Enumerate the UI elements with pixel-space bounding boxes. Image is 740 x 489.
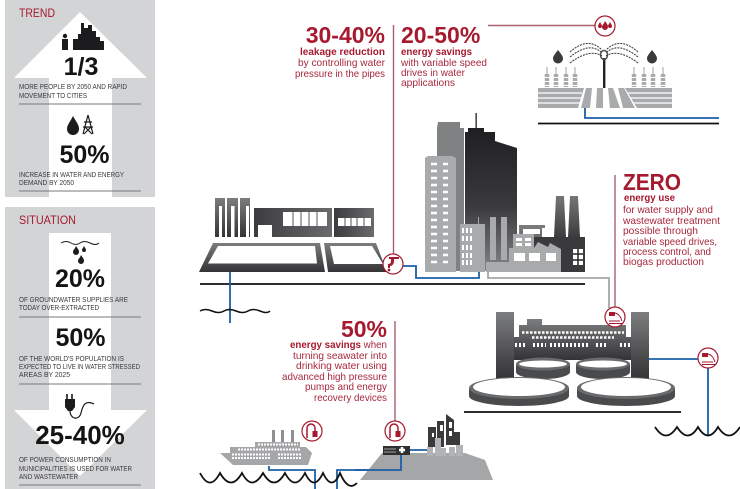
- wave: sea: [200, 473, 357, 486]
- text: zero energy use: [622, 169, 720, 268]
- caption: population: AREAS BY 2025: [19, 370, 70, 379]
- caption: groundwater: OF GROUNDWATER SUPPLIES ARE: [19, 295, 128, 304]
- caption: increase: DEMAND BY 2050: [19, 178, 74, 187]
- text: variable speed drives: with variable speed: [400, 57, 487, 69]
- text: zero energy use: variable speed drives,: [623, 236, 717, 248]
- caption: population: [19, 354, 140, 379]
- panel: situation: [5, 207, 155, 489]
- caption: power: MUNICIPALITIES IS USED FOR WATER: [19, 464, 132, 473]
- text: zero energy use: energy use: [624, 192, 675, 204]
- text: desalination savings: turning seawater into: [293, 350, 387, 362]
- caption: increase: [19, 170, 124, 187]
- icon: wastewater treatment marker: [605, 307, 625, 327]
- caption: power: [19, 455, 132, 481]
- stat: one third: 1/3: [64, 53, 98, 81]
- text: zero energy use: process control, and: [623, 246, 711, 258]
- icon: irrigation drops: [595, 16, 615, 36]
- panel: trend: [5, 0, 155, 197]
- caption: population: EXPECTED TO LIVE IN WATER STRESSED: [19, 362, 140, 371]
- illustration: water treatment works: [199, 198, 387, 272]
- caption: more people: [19, 82, 127, 100]
- icon: outflow marker: [698, 348, 718, 368]
- icon: tap: [383, 254, 403, 274]
- arrow: up: [14, 12, 147, 197]
- text: desalination savings: [282, 316, 388, 404]
- text: zero energy use: biogas production: [623, 256, 704, 268]
- text: variable speed drives: applications: [401, 77, 455, 89]
- illustration: irrigated field: [538, 43, 672, 108]
- caption: power: AND WASTEWATER: [19, 472, 78, 481]
- icon: person and city: [62, 23, 104, 50]
- text: leakage reduction: [295, 22, 385, 80]
- text: desalination savings: pumps and energy: [305, 381, 388, 393]
- illustration: wastewater plant: [469, 312, 675, 406]
- stat: fifty percent population: 50%: [55, 324, 106, 352]
- text: desalination savings: recovery devices: [314, 392, 387, 404]
- icon: plug: [65, 394, 94, 418]
- text: zero energy use: for water supply and: [623, 204, 713, 216]
- heading: situation: SITUATION: [19, 213, 76, 227]
- text: desalination savings: energy savings when: [290, 339, 387, 351]
- illustration: island and coastal city: [355, 414, 493, 480]
- text: desalination savings: drinking water using: [296, 360, 387, 372]
- text: leakage reduction: 30-40%: [306, 22, 385, 48]
- icon: desalination marker: [385, 421, 405, 441]
- stat: power share: 25-40%: [35, 420, 125, 450]
- stat: fifty percent: 50%: [59, 141, 110, 169]
- icon: drop and pylon: [67, 115, 93, 135]
- caption: more people: MORE PEOPLE BY 2050 AND RAPID: [19, 82, 127, 91]
- wave: intake: [200, 310, 270, 312]
- text: zero energy use: ZERO: [623, 169, 681, 195]
- caption: increase: INCREASE IN WATER AND ENERGY: [19, 170, 124, 179]
- icon: groundwater: [61, 242, 99, 264]
- text: variable speed drives: 20-50%: [401, 22, 480, 48]
- illustration: city skyline: [425, 113, 585, 272]
- text: desalination savings: 50%: [341, 316, 387, 342]
- heading: trend: TREND: [19, 6, 55, 20]
- wave: outflow: [655, 427, 740, 436]
- text: leakage reduction: leakage reduction: [300, 46, 385, 58]
- connector lines: [200, 25, 719, 489]
- text: zero energy use: possible through: [623, 225, 698, 237]
- text: leakage reduction: by controlling water: [298, 57, 385, 69]
- caption: groundwater: [19, 295, 128, 312]
- caption: power: OF POWER CONSUMPTION IN: [19, 455, 111, 464]
- text: zero energy use: wastewater treatment: [622, 215, 720, 227]
- text: variable speed drives: drives in water: [401, 67, 465, 79]
- text: variable speed drives: energy savings: [401, 46, 472, 58]
- text: variable speed drives: [400, 22, 487, 89]
- caption: population: OF THE WORLD'S POPULATION IS: [19, 354, 124, 363]
- stat: twenty percent: 20%: [55, 265, 105, 293]
- text: desalination savings: advanced high pressure: [282, 371, 387, 383]
- text: leakage reduction: pressure in the pipes: [295, 68, 385, 80]
- icon: ship desalination marker: [302, 421, 322, 441]
- caption: groundwater: TODAY OVER-EXTRACTED: [19, 303, 99, 312]
- illustration: cruise ship: [220, 430, 312, 465]
- arrow: down: [14, 233, 147, 476]
- caption: more people: MOVEMENT TO CITIES: [19, 91, 87, 100]
